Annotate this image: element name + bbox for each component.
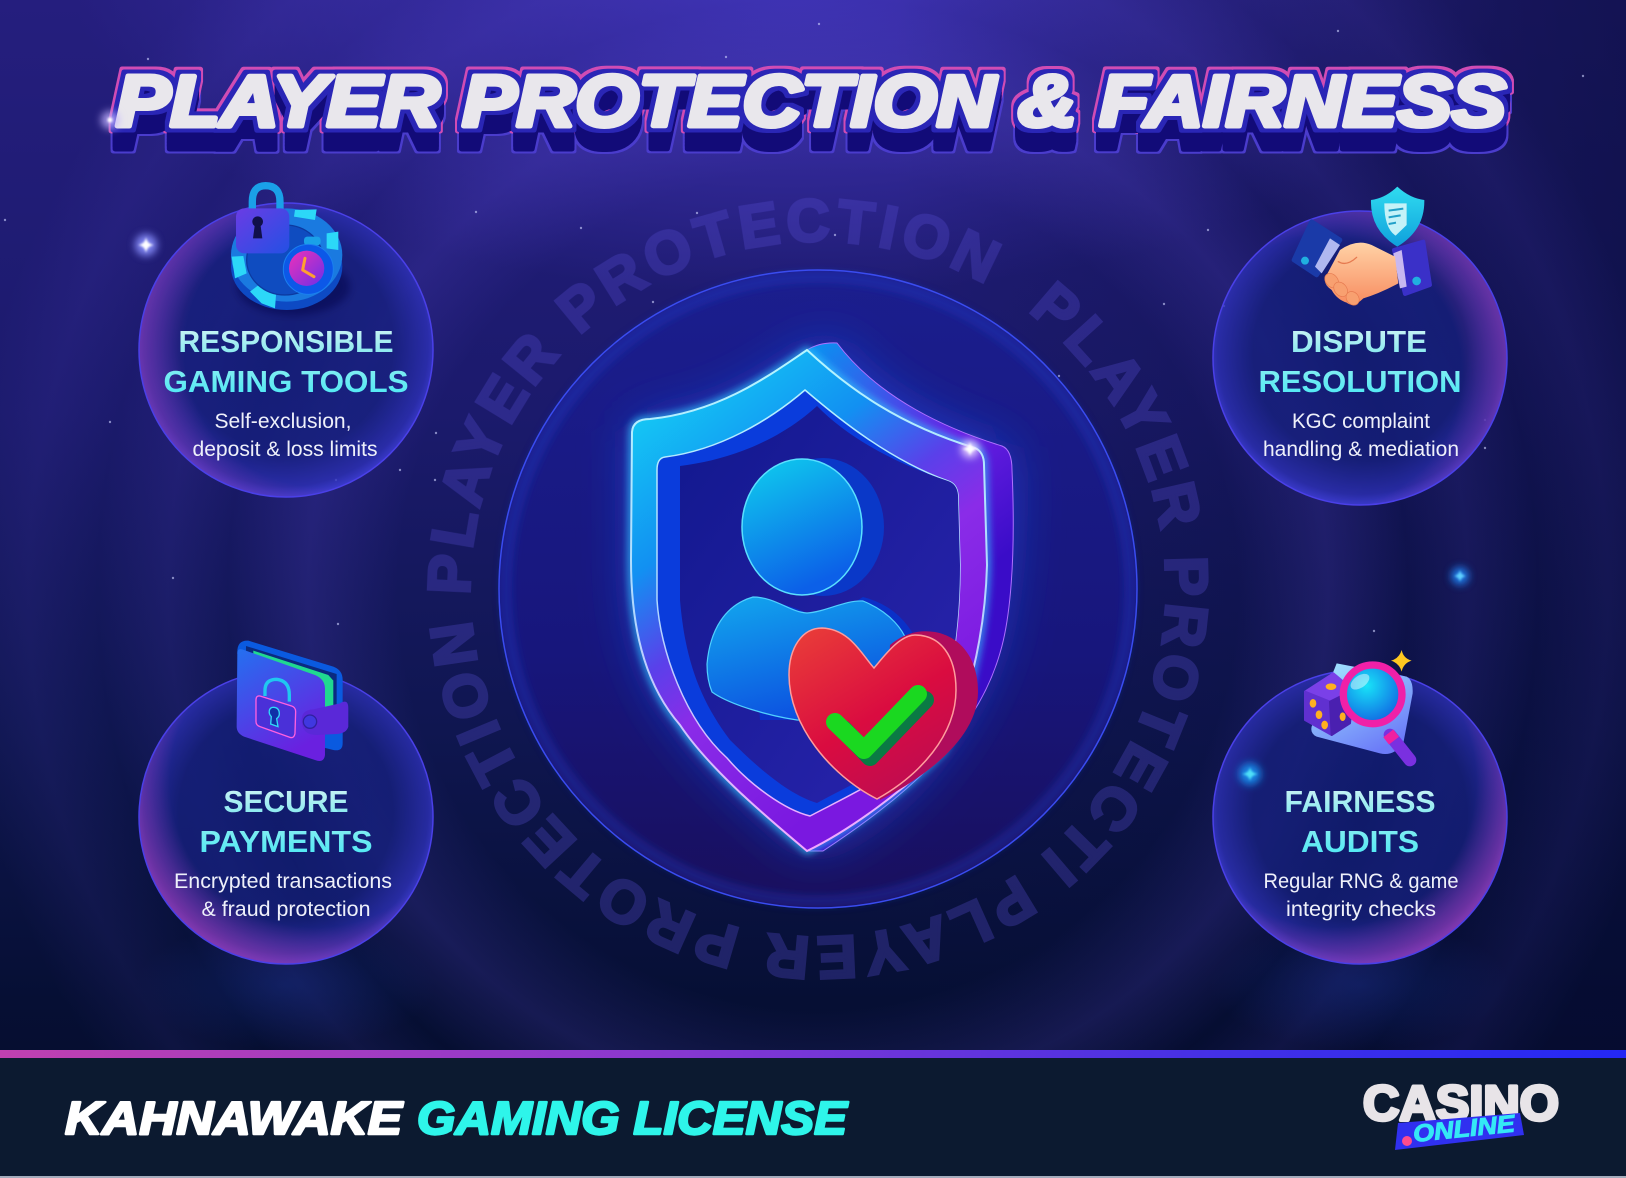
watermark: circular text: PLAYER PROTECTION bbox=[429, 622, 1038, 980]
panel: responsible gaming tools bbox=[139, 186, 433, 497]
panel: secure payments bbox=[139, 641, 433, 964]
card description: Self-exclusion, bbox=[214, 409, 352, 433]
panel: central disc bbox=[499, 270, 1137, 908]
card heading: DISPUTE bbox=[1291, 324, 1427, 359]
card description: Encrypted transactions bbox=[174, 869, 392, 893]
shield recess bbox=[680, 406, 960, 803]
card heading line 2: RESOLUTION bbox=[1258, 364, 1462, 399]
sparkle on shield bbox=[961, 440, 979, 458]
player icon bbox=[707, 458, 912, 722]
footer band bbox=[0, 1050, 1626, 1178]
footer accent bar bbox=[0, 1050, 1626, 1058]
icon: chip, lock and timer bbox=[231, 186, 350, 315]
sparkle: fairness card bbox=[1239, 763, 1261, 785]
sparkle: title flare bbox=[101, 111, 119, 129]
footer label: Gaming License: GAMING LICENSE bbox=[417, 1092, 848, 1144]
card description line 2: integrity checks bbox=[1286, 897, 1436, 921]
footer label: Kahnawake: KAHNAWAKE bbox=[65, 1092, 403, 1144]
card heading: FAIRNESS bbox=[1284, 784, 1436, 819]
icon: handshake and shield bbox=[1294, 187, 1430, 308]
card description line 2: handling & mediation bbox=[1263, 437, 1459, 461]
heart with check mark bbox=[789, 628, 978, 800]
card description line 2: & fraud protection bbox=[202, 897, 370, 921]
watermark: circular text bbox=[426, 198, 1209, 980]
watermark: circular text: PLAYER PROTECTI bbox=[1029, 280, 1209, 888]
title: PLAYER PROTECTION & FAIRNESS bbox=[116, 62, 1506, 142]
panel: fairness audits bbox=[1213, 650, 1507, 964]
icon: wallet with padlock bbox=[237, 641, 348, 761]
card disc bbox=[139, 670, 433, 964]
star field bbox=[4, 23, 1584, 632]
card disc bbox=[1213, 211, 1507, 505]
shield extruded side bbox=[807, 343, 1013, 851]
card heading line 2: PAYMENTS bbox=[200, 824, 372, 859]
sparkle: right blue bbox=[1451, 567, 1469, 585]
icon: dice and magnifier bbox=[1305, 650, 1413, 760]
logo: Casino.Online: CASINO bbox=[1363, 1077, 1559, 1131]
card heading: RESPONSIBLE bbox=[178, 324, 394, 359]
card description line 2: deposit & loss limits bbox=[192, 437, 378, 461]
shield glow bbox=[631, 343, 1012, 851]
card disc bbox=[139, 203, 433, 497]
shield inner wall bbox=[657, 390, 960, 816]
central icon: shield with player and heart bbox=[631, 343, 1013, 851]
sparkle: top left bbox=[135, 234, 157, 256]
panel: dispute resolution bbox=[1213, 187, 1507, 505]
shield front rim bbox=[631, 350, 987, 851]
card description: KGC complaint bbox=[1292, 409, 1430, 433]
card heading line 2: GAMING TOOLS bbox=[164, 364, 408, 399]
card heading line 2: AUDITS bbox=[1301, 824, 1419, 859]
card disc bbox=[1213, 670, 1507, 964]
watermark: circular text: PLAYER PROTECTION bbox=[426, 198, 1002, 592]
logo: Casino.Online: ONLINE bbox=[1412, 1110, 1517, 1148]
card description: Regular RNG & game bbox=[1264, 869, 1458, 893]
card heading: SECURE bbox=[224, 784, 348, 819]
